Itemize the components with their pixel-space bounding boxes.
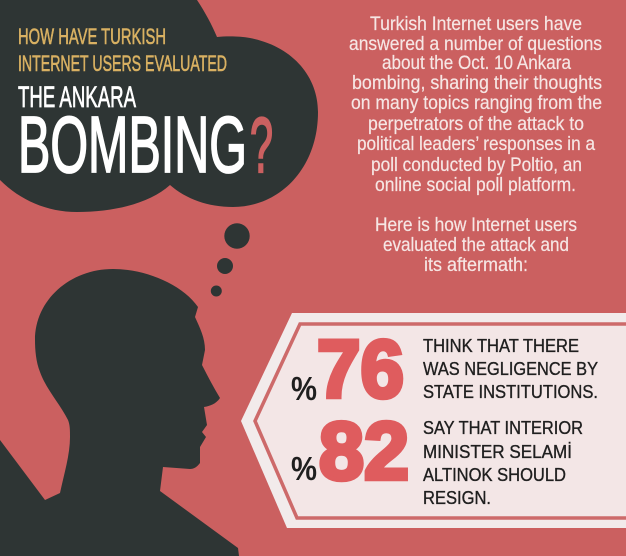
heading: the Ankara: THE ANKARA <box>18 81 136 114</box>
intro paragraph: bombing, sharing their thoughts <box>352 72 602 94</box>
intro paragraph: online social poll platform. <box>375 174 576 196</box>
stat: 76 percent: 76 <box>317 324 404 415</box>
heading: bombing: BOMBING <box>18 100 247 189</box>
text: negligence finding: STATE INSTITUTIONS. <box>423 381 598 402</box>
heading: how have Turkish Internet users evaluated: INTERNET USERS EVALUATED <box>18 51 227 76</box>
panel: poll results <box>241 313 626 528</box>
icon: thought bubbles <box>211 223 250 296</box>
stat: 82 percent: % <box>291 450 317 487</box>
lead-in paragraph: Here is how Internet users <box>375 214 577 236</box>
icon: head silhouette <box>0 269 239 556</box>
stat: 76 percent: % <box>291 370 317 407</box>
text: negligence finding: WAS NEGLIGENCE BY <box>423 358 598 379</box>
intro paragraph <box>349 13 602 196</box>
text: resignation finding: ALTINOK SHOULD <box>423 464 566 485</box>
question mark: ? <box>250 101 273 189</box>
text: negligence finding <box>423 335 598 402</box>
intro paragraph: political leaders’ responses in a <box>357 133 595 155</box>
text: resignation finding <box>423 417 583 508</box>
intro paragraph: poll conducted by Poltio, an <box>371 154 582 176</box>
lead-in paragraph <box>375 214 577 276</box>
heading: how have Turkish Internet users evaluated <box>18 24 227 76</box>
intro paragraph: Turkish Internet users have <box>370 13 582 35</box>
lead-in paragraph: evaluated the attack and <box>383 234 569 256</box>
intro paragraph: about the Oct. 10 Ankara <box>382 52 571 74</box>
thought cloud with title <box>0 0 318 212</box>
intro paragraph: perpetrators of the attack to <box>368 113 584 135</box>
heading: how have Turkish Internet users evaluated: HOW HAVE TURKISH <box>18 24 166 49</box>
text: resignation finding: SAY THAT INTERIOR <box>423 417 583 438</box>
text: resignation finding: RESIGN. <box>423 487 491 508</box>
intro paragraph: on many topics ranging from the <box>351 92 602 114</box>
intro paragraph: answered a number of questions <box>349 33 602 55</box>
lead-in paragraph: its aftermath: <box>424 254 528 276</box>
text: resignation finding: MINISTER SELAMİ <box>423 441 572 462</box>
text: negligence finding: THINK THAT THERE <box>423 335 579 356</box>
stat: 82 percent: 82 <box>319 406 409 497</box>
